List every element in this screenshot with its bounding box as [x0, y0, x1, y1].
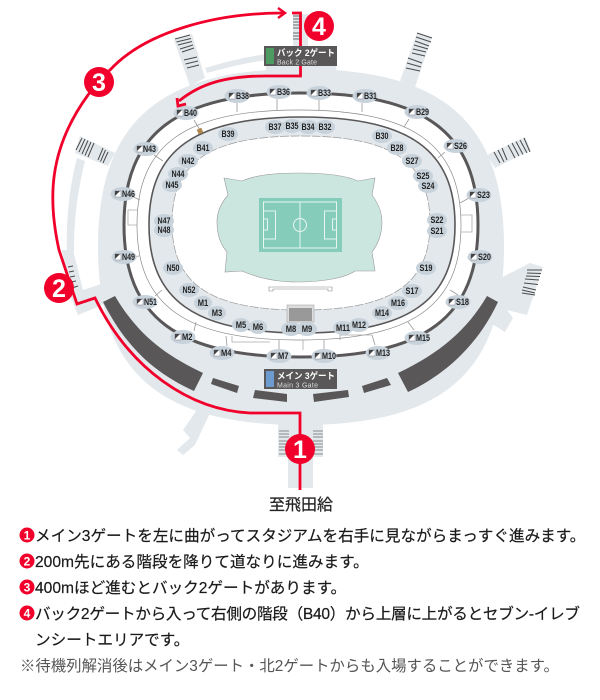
inner block labels: B41	[196, 143, 210, 153]
stadium grounds	[62, 14, 543, 488]
inner block labels: B30	[376, 131, 388, 141]
note: ※待機列解消後はメイン3ゲート・北2ゲートからも入場することができます。	[20, 657, 559, 675]
gate spur: north-west	[174, 34, 205, 86]
inner block labels: B34	[302, 122, 314, 132]
outer entrance labels: B40	[184, 108, 197, 118]
inner block labels: M14	[375, 308, 389, 318]
outer strip: north-west	[205, 54, 267, 73]
inner block labels: S24	[422, 181, 434, 191]
main 3 gate label: メイン 3ゲート	[277, 370, 335, 381]
soccer pitch	[259, 198, 342, 252]
red route	[53, 8, 300, 490]
outer entrance labels: S20	[478, 252, 491, 262]
inner block labels: M16	[391, 298, 405, 308]
direction step 3: 3	[24, 580, 31, 594]
arrow head: to B40	[177, 98, 186, 106]
inner block labels: M11	[336, 323, 350, 333]
field surround	[217, 173, 382, 282]
outer entrance labels: M7	[278, 351, 288, 361]
direction step 2: 2	[24, 554, 31, 568]
inner block labels: N42	[182, 156, 194, 166]
outer entrance labels: B36	[277, 87, 290, 97]
outer concourse ring	[124, 93, 478, 357]
outer entrance labels: B31	[364, 91, 377, 101]
inner block labels: B37	[268, 122, 282, 132]
inner block labels: N50	[166, 263, 180, 273]
outer entrance labels: N51	[144, 297, 157, 307]
direction step 4: バック2ゲートから入って右側の階段（B40）から上層に上がるとセブン-イレブ	[35, 604, 580, 623]
inner block labels: M3	[212, 308, 222, 318]
inner stand ring	[149, 117, 455, 333]
route marker 4	[304, 11, 334, 41]
inner block labels: N45	[166, 180, 178, 190]
outer entrance labels: N46	[122, 189, 135, 199]
outer entrance labels: B38	[236, 91, 249, 101]
outer entrance labels: M2	[182, 332, 192, 342]
gate spur: west	[75, 136, 115, 166]
bottom gate apron	[278, 420, 323, 488]
inner block labels: S27	[406, 156, 418, 166]
back 2 gate label	[264, 46, 337, 66]
inner block labels: B32	[318, 122, 332, 132]
inner block labels: N44	[172, 169, 184, 179]
inner block labels: B28	[390, 143, 404, 153]
connector stairs	[128, 99, 472, 350]
inner block labels: S22	[430, 215, 444, 225]
gate stripes	[68, 16, 542, 454]
outer strip: west	[67, 158, 85, 252]
route marker 3: 3	[92, 69, 106, 97]
destination label: 至飛田給	[269, 496, 333, 514]
route marker 2	[44, 273, 74, 303]
gate spur: south-west	[62, 250, 112, 315]
main 3 gate label: Main 3 Gate	[277, 382, 318, 390]
inner block labels	[154, 119, 447, 336]
direction step 2: 200m先にある階段を降りて道なりに進みます。	[35, 553, 369, 571]
route marker 4: 4	[312, 13, 326, 41]
outer entrance labels: M4	[221, 348, 232, 358]
route marker 1: 1	[293, 436, 307, 464]
route marker 1	[285, 434, 315, 464]
outer entrance labels: M15	[416, 333, 430, 343]
dark plaza bands	[103, 296, 498, 402]
mid outline ring	[137, 110, 461, 340]
south media strip	[269, 287, 332, 291]
direction step 4	[20, 604, 580, 649]
top gate apron	[266, 14, 336, 74]
back 2 gate label: バック 2ゲート	[277, 47, 335, 58]
direction step 3: 400mほど進むとバック2ゲートがあります。	[35, 579, 346, 597]
back 2 gate label: Back 2 Gate	[277, 60, 317, 66]
inner block labels: S17	[406, 286, 418, 296]
outer entrance labels: B29	[416, 107, 429, 117]
inner block labels: S25	[416, 171, 430, 181]
outer entrance labels: M13	[376, 348, 390, 358]
outer entrance labels: B33	[318, 88, 331, 98]
inner block labels: N52	[182, 285, 196, 295]
inner block labels: M9	[302, 324, 312, 334]
route marker 2: 2	[52, 275, 66, 303]
route marker 3	[84, 67, 114, 97]
outer entrance labels: N49	[122, 252, 135, 262]
outer entrance labels	[110, 85, 492, 363]
inner block labels: B35	[286, 121, 298, 131]
direction step 1: 1	[24, 528, 31, 542]
outer entrance labels: M10	[322, 351, 336, 361]
inner block labels: M1	[198, 298, 208, 308]
inner block labels: M8	[286, 324, 296, 334]
arrow head: to back gate	[278, 8, 285, 18]
outer entrance labels: N43	[143, 144, 156, 154]
gate spur: east	[487, 137, 531, 168]
direction step 4: ンシートエリアです。	[35, 631, 189, 649]
main 3 gate label	[264, 369, 337, 390]
gate spur: south ramp	[177, 405, 210, 455]
inner block labels: N47	[158, 216, 170, 226]
inner block labels: S19	[420, 263, 432, 273]
inner block labels: N48	[158, 225, 170, 235]
outer entrance labels: S26	[454, 141, 467, 151]
inner block labels: B39	[222, 129, 234, 139]
gate spur: south-east	[480, 263, 543, 332]
outer entrance labels: S18	[456, 297, 469, 307]
outer entrance labels: S23	[477, 190, 490, 200]
direction step 1: メイン3ゲートを左に曲がってスタジアムを右手に見ながらまっすぐ進みます。	[35, 527, 585, 545]
bowl	[172, 136, 430, 310]
inner block labels: M6	[253, 322, 263, 332]
inner block labels: M5	[236, 320, 246, 330]
inner block labels: S21	[430, 226, 444, 236]
brown stair marker	[197, 128, 203, 134]
direction step 4: 4	[24, 606, 31, 620]
gate spur: north-east	[400, 33, 432, 87]
inner block labels: M12	[352, 320, 366, 330]
control box	[287, 305, 314, 322]
